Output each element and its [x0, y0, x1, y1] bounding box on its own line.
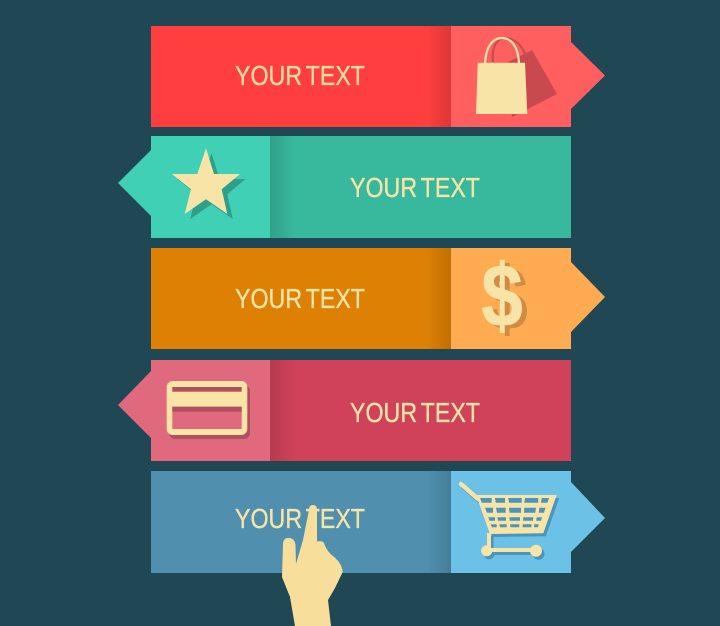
label: banner 5 text: YOUR TEXT	[235, 503, 365, 534]
icon: dollar sign: $	[486, 250, 528, 348]
label: banner 1 text: YOUR TEXT	[235, 60, 365, 91]
icon: star	[172, 148, 246, 219]
icon: credit card	[167, 381, 250, 439]
arrow tab: banner 5	[451, 471, 605, 573]
icon: shopping bag	[476, 38, 557, 117]
banner 1: red shopping bag	[151, 26, 605, 127]
arrow tab: banner 1	[451, 26, 605, 127]
icon: shopping cart	[461, 484, 559, 560]
banner 3: orange dollar	[151, 247, 605, 349]
label: banner 4 text: YOUR TEXT	[350, 397, 480, 428]
arrow tab: banner 2	[118, 136, 270, 238]
icon: dollar sign: $	[481, 247, 523, 345]
label: banner 3 text: YOUR TEXT	[235, 283, 365, 314]
icon: pointing hand	[282, 505, 343, 626]
banner 2: teal star	[118, 136, 571, 238]
banner 4: rose credit card	[118, 360, 571, 461]
arrow tab: banner 3	[451, 248, 605, 349]
arrow tab: banner 4	[118, 360, 270, 461]
banner 5: blue shopping cart	[151, 471, 605, 573]
label: banner 2 text: YOUR TEXT	[350, 172, 480, 203]
